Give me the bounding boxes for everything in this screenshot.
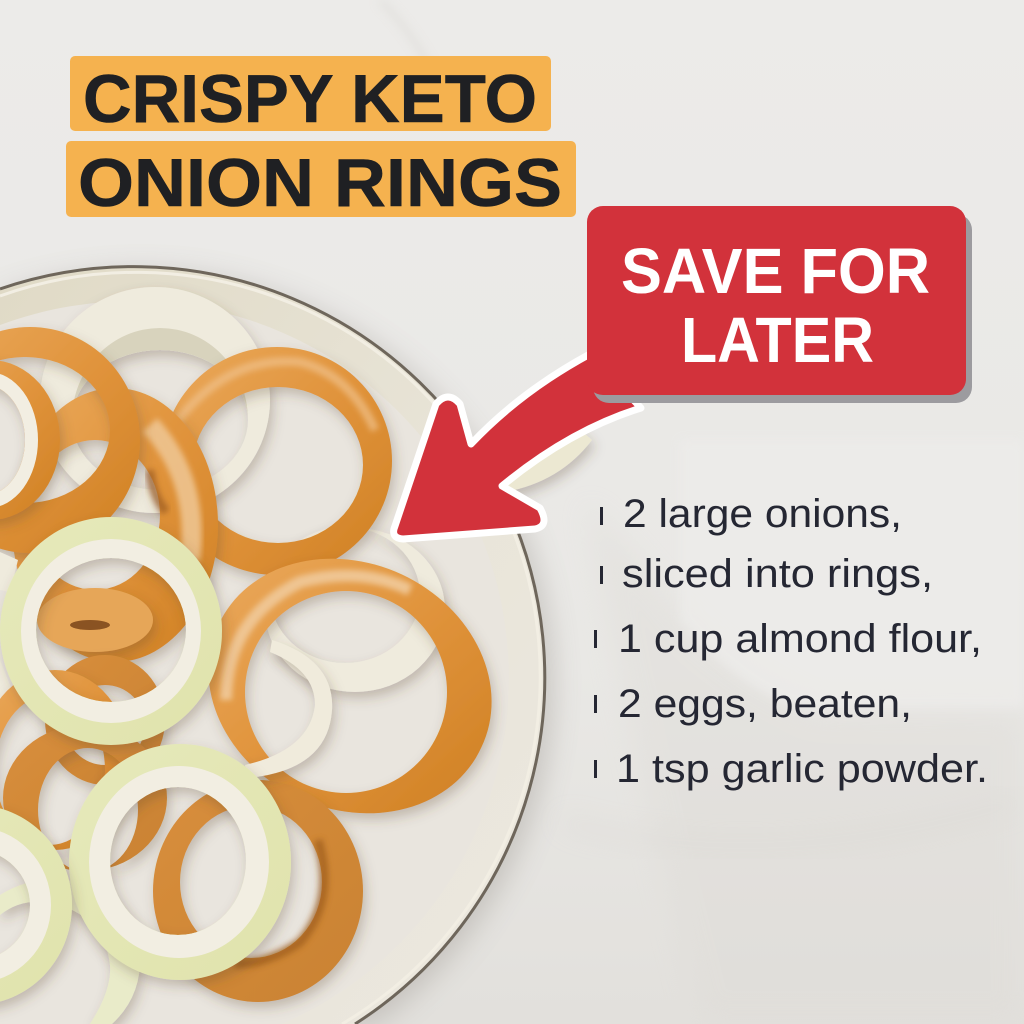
- title line 2: ONION RINGS: [78, 145, 562, 221]
- fried ring: left middle: [12, 388, 218, 662]
- callout: save for later: SAVE FOR: [621, 235, 930, 307]
- title line 1: CRISPY KETO: [83, 61, 537, 137]
- fried ring: lower left pale: [0, 670, 130, 850]
- onion fragment under arrow: [500, 425, 592, 492]
- onion scraps at left edge: [0, 552, 18, 700]
- fried ring: small far left: [0, 360, 60, 520]
- ingredient 3: 1 cup almond flour,: [618, 617, 982, 661]
- ingredient 1: 2 large onions,: [623, 492, 902, 536]
- title: [66, 56, 576, 221]
- onion ring: raw white, back top: [40, 287, 270, 513]
- plate: [0, 267, 553, 1024]
- ingredient 4: 2 eggs, beaten,: [618, 682, 912, 726]
- fried ring: lower left front: [3, 725, 167, 872]
- fried ring: large centre: [208, 559, 492, 813]
- fried ring: top left: [0, 327, 140, 553]
- fried ring: bottom centre: [153, 780, 363, 1002]
- onion ring: raw green lower: [69, 744, 291, 980]
- ingredient 5: 1 tsp garlic powder.: [616, 747, 988, 791]
- callout: save for later: [587, 206, 972, 403]
- ingredient list: [594, 492, 988, 791]
- ingredient 2: sliced into rings,: [622, 552, 933, 596]
- onion ring: raw white, behind centre: [265, 527, 445, 692]
- onion ring: raw green left bottom: [0, 805, 72, 1005]
- callout: save for later: LATER: [681, 304, 874, 376]
- fried ring: lower left back piece: [45, 655, 165, 785]
- arrow: [394, 354, 641, 539]
- fried ring: upper centre: [162, 347, 392, 575]
- onion ring: small white arc: [245, 640, 332, 778]
- fried ring: inside green ring: [37, 588, 153, 652]
- onion ring: raw far bottom: [0, 879, 140, 1024]
- onion ring: raw green upper: [0, 517, 222, 745]
